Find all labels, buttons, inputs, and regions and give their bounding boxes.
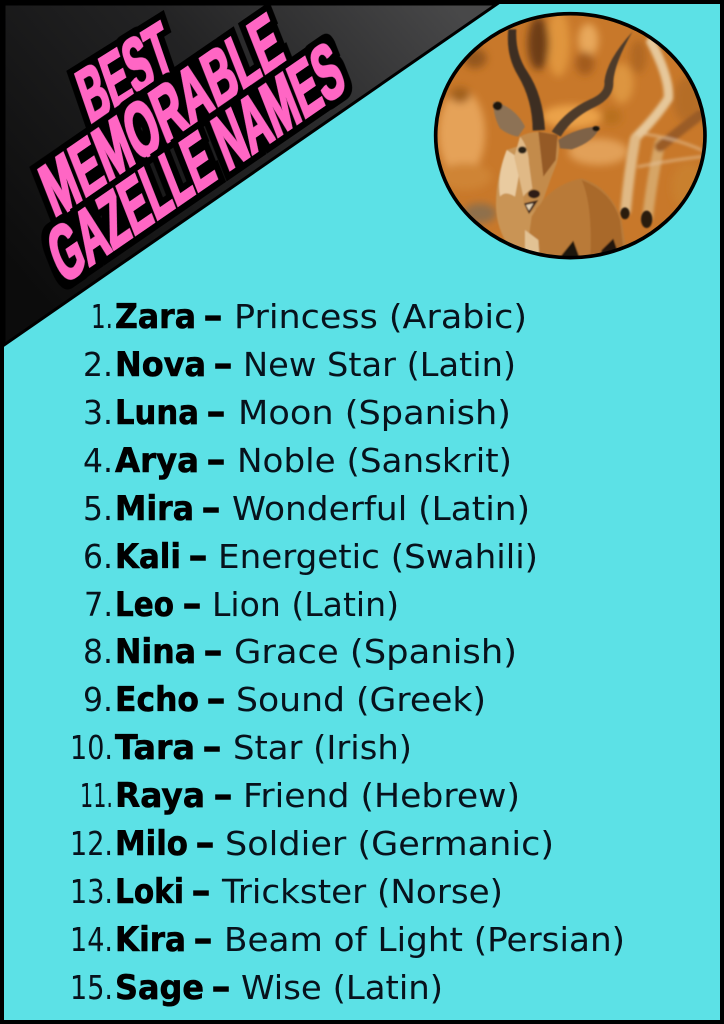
- row 2: Nova: [115, 345, 206, 385]
- row 12: -: [195, 824, 215, 864]
- row 9: -: [206, 680, 226, 720]
- row 9: 9.: [83, 680, 113, 719]
- row 5: Mira: [115, 489, 194, 529]
- row 15: Sage: [115, 968, 204, 1008]
- row 13: 13.: [70, 872, 113, 911]
- row 7: [84, 585, 399, 625]
- icon: gazelle neck and body: [493, 102, 628, 263]
- row 9: Echo: [115, 680, 199, 720]
- row 6: -: [188, 537, 208, 577]
- row 5: [83, 489, 530, 529]
- row 11: -: [213, 776, 233, 816]
- row 1: Princess (Arabic): [234, 297, 527, 336]
- row 7: 7.: [84, 585, 113, 624]
- row 9: [83, 680, 486, 720]
- row 10: 10.: [70, 728, 113, 767]
- row 6: 6.: [83, 537, 113, 576]
- row 14: -: [193, 920, 213, 960]
- row 11: [80, 776, 520, 816]
- photo: gazelle in oval frame: [434, 12, 707, 260]
- row 12: [70, 824, 554, 864]
- row 3: 3.: [83, 393, 113, 432]
- row 8: 8.: [83, 632, 113, 671]
- row 11: Raya: [115, 776, 205, 816]
- row 10: -: [202, 728, 222, 768]
- row 4: Arya: [115, 441, 199, 481]
- row 2: -: [213, 345, 233, 385]
- row 12: Milo: [115, 824, 188, 864]
- row 4: -: [206, 441, 226, 481]
- row 4: [83, 441, 512, 481]
- row 4: Noble (Sanskrit): [237, 441, 512, 480]
- row 14: Beam of Light (Persian): [224, 920, 625, 959]
- row 1: 1.: [91, 297, 113, 336]
- row 3: [83, 393, 511, 433]
- photo frame: [436, 14, 705, 258]
- row 1: Zara: [115, 297, 196, 337]
- row 3: Moon (Spanish): [238, 393, 511, 432]
- row 11: Friend (Hebrew): [243, 776, 520, 815]
- row 9: Sound (Greek): [236, 680, 486, 719]
- icon: ears: [493, 102, 525, 137]
- row 8: [83, 632, 517, 672]
- row 5: 5.: [83, 489, 113, 528]
- row 2: [83, 345, 516, 385]
- row 6: Kali: [115, 537, 181, 577]
- row 2: New Star (Latin): [243, 345, 516, 384]
- row 13: Loki: [115, 872, 184, 912]
- row 7: Leo: [115, 585, 174, 625]
- row 10: Tara: [115, 728, 195, 768]
- row 7: -: [182, 585, 202, 625]
- row 10: [70, 728, 412, 768]
- row 12: 12.: [70, 824, 113, 863]
- row 6: Energetic (Swahili): [218, 537, 538, 576]
- title: [30, 0, 354, 300]
- row 4: 4.: [83, 441, 113, 480]
- row 13: Trickster (Norse): [221, 872, 503, 911]
- row 14: [70, 920, 625, 960]
- row 8: Grace (Spanish): [234, 632, 517, 671]
- row 15: [70, 968, 443, 1008]
- icon: head: [520, 132, 560, 210]
- dark diagonal banner: [4, 4, 497, 345]
- row 1: [91, 297, 527, 337]
- row 5: -: [201, 489, 221, 529]
- icon: horns: [508, 29, 632, 137]
- row 10: Star (Irish): [233, 728, 412, 767]
- row 15: 15.: [70, 968, 113, 1007]
- row 11: 11.: [80, 776, 113, 815]
- row 13: -: [191, 872, 211, 912]
- row 3: Luna: [115, 393, 199, 433]
- row 6: [83, 537, 538, 577]
- row 15: -: [211, 968, 231, 1008]
- row 12: Soldier (Germanic): [225, 824, 554, 863]
- row 13: [70, 872, 503, 912]
- row 8: Nina: [115, 632, 196, 672]
- icon: hooves of rear legs: [620, 207, 652, 228]
- row 14: Kira: [115, 920, 186, 960]
- row 2: 2.: [83, 345, 113, 384]
- names list: [70, 297, 625, 1008]
- row 8: -: [203, 632, 223, 672]
- row 5: Wonderful (Latin): [232, 489, 530, 528]
- row 3: -: [206, 393, 226, 433]
- row 1: -: [203, 297, 223, 337]
- row 14: 14.: [70, 920, 113, 959]
- row 15: Wise (Latin): [241, 968, 443, 1007]
- row 7: Lion (Latin): [212, 585, 399, 624]
